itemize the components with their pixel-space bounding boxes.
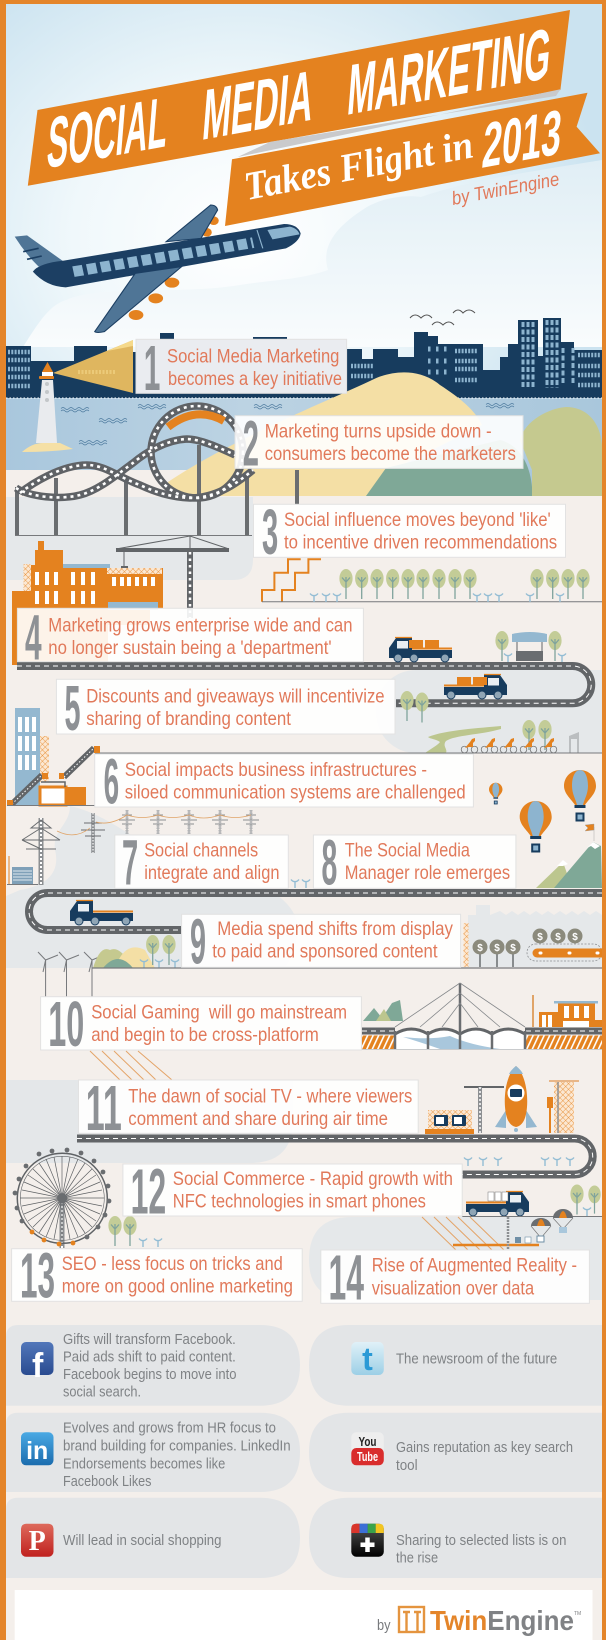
box 5	[56, 672, 395, 744]
beige lower ground	[6, 496, 602, 656]
box 14	[321, 1241, 589, 1313]
byline: by TwinEngine	[450, 169, 561, 210]
icon: YouTube: You	[358, 1434, 377, 1449]
panel: Facebook	[6, 1325, 300, 1406]
icon: YouTube	[351, 1432, 384, 1465]
sky	[6, 4, 602, 400]
box 6: siloed communication systems are challenged	[125, 781, 466, 803]
box 6: Social impacts business infrastructures -	[125, 759, 427, 781]
ground line 3	[92, 967, 602, 969]
crane	[116, 536, 229, 618]
grey zone: road 3	[6, 1080, 293, 1163]
box 1: Social Media Marketing	[167, 346, 339, 368]
trees by wheel	[108, 1216, 162, 1247]
panel: LinkedIn	[6, 1413, 300, 1492]
logo wordmark: TwinEngine	[430, 1605, 574, 1636]
panel: LinkedIn: Evolves and grows from HR focus to	[63, 1420, 276, 1437]
tall crane	[464, 1087, 504, 1133]
box 13	[12, 1240, 302, 1312]
footer panel: by	[377, 1617, 391, 1634]
panel: YouTube: Gains reputation as key search	[396, 1439, 573, 1456]
bridge	[362, 983, 602, 1050]
sea	[6, 398, 602, 496]
money bags and conveyor: $	[572, 932, 578, 943]
box 13: more on good online marketing	[62, 1276, 293, 1298]
grey zone: lower road 1	[376, 670, 602, 753]
box 1: 1	[144, 332, 160, 404]
balloons	[489, 770, 596, 852]
clouds	[23, 160, 602, 347]
box 2: Marketing turns upside down -	[265, 420, 492, 442]
skyline	[6, 318, 602, 398]
stairs	[262, 559, 321, 602]
panel: Google Plus: the rise	[396, 1549, 438, 1566]
money bags and conveyor: $	[477, 943, 483, 954]
panel: Twitter	[309, 1325, 602, 1406]
gate	[569, 732, 579, 753]
box 7: integrate and align	[144, 862, 280, 884]
box 7	[115, 826, 288, 898]
box 13: 13	[20, 1240, 55, 1312]
box 12: NFC technologies in smart phones	[173, 1191, 426, 1213]
box 14: visualization over data	[372, 1277, 534, 1299]
green path	[425, 726, 501, 753]
box 10: 10	[48, 988, 84, 1060]
panel: LinkedIn: brand building for companies. LinkedIn	[63, 1437, 291, 1454]
TV platform	[425, 1110, 474, 1134]
panel: LinkedIn: Facebook Likes	[63, 1473, 152, 1490]
box 7: Social channels	[144, 840, 258, 862]
box 2	[235, 408, 523, 480]
tower and escalators	[7, 708, 100, 806]
sprouts between boxes	[291, 880, 310, 888]
box 1: becomes a key initiative	[168, 368, 342, 390]
box 6: 6	[104, 745, 119, 817]
box 9	[182, 905, 461, 977]
money bags and conveyor: $	[555, 932, 561, 943]
footer panel: TM	[574, 1611, 581, 1617]
money bags and conveyor	[464, 923, 602, 967]
footer panel	[15, 1590, 592, 1640]
birds	[410, 310, 475, 325]
box 12	[123, 1155, 462, 1227]
panel: YouTube: tool	[396, 1457, 418, 1474]
panel: Facebook: social search.	[63, 1384, 141, 1401]
box 14: 14	[328, 1241, 364, 1313]
ribbon shadow	[238, 89, 560, 157]
market stall	[495, 631, 566, 662]
icon: YouTube: Tube	[357, 1449, 378, 1464]
airplane	[15, 205, 301, 332]
box 8: The Social Media	[345, 840, 470, 862]
panel: LinkedIn: Endorsements becomes like	[63, 1455, 225, 1472]
box 3: Social influence moves beyond 'like'	[284, 509, 551, 531]
box 11: comment and share during air time	[128, 1108, 388, 1130]
box 8	[313, 826, 516, 898]
ferris wheel	[13, 1148, 111, 1248]
beige ground	[6, 470, 276, 500]
logo icon	[399, 1607, 424, 1632]
grey zone: road 2 wave	[6, 806, 298, 968]
box 7: 7	[122, 826, 138, 898]
panel: Facebook: Facebook begins to move into	[63, 1366, 236, 1383]
panel: Pinterest	[6, 1498, 300, 1578]
cyclists	[461, 720, 557, 753]
factory	[12, 541, 163, 665]
ground line 2	[95, 752, 602, 754]
icon: Google Plus	[351, 1524, 384, 1557]
sprouts by road 3	[464, 1158, 574, 1166]
money bags and conveyor: $	[494, 943, 500, 954]
sand behind coaster	[168, 445, 300, 496]
title: subtitle: Takes Flight in	[240, 122, 477, 209]
lighthouse	[22, 362, 73, 452]
green hill	[366, 440, 532, 496]
grey factory silhouette	[468, 905, 602, 967]
sand hill	[168, 372, 482, 496]
lighthouse beam	[53, 340, 133, 393]
truck 4	[466, 1192, 529, 1216]
roller coaster	[15, 406, 297, 536]
construction tower	[547, 1081, 579, 1133]
title: main: MEDIA	[200, 56, 316, 156]
box 3: to incentive driven recommendations	[284, 531, 557, 553]
money bags and conveyor: $	[510, 943, 516, 954]
icon: Pinterest	[21, 1524, 54, 1557]
icon: LinkedIn	[21, 1432, 54, 1465]
icon: Facebook: f	[32, 1347, 44, 1385]
ground line 4	[462, 1216, 602, 1218]
road 3	[77, 1138, 593, 1174]
trees right	[570, 1184, 601, 1216]
box 12: Social Commerce - Rapid growth with	[173, 1168, 453, 1190]
mountains	[536, 824, 602, 888]
wind turbines	[38, 952, 104, 997]
box 4: 4	[25, 601, 42, 673]
box 9: to paid and sponsored content	[212, 941, 438, 963]
building by bridge	[533, 995, 602, 1027]
panel: Pinterest: Will lead in social shopping	[63, 1532, 222, 1549]
money bags and conveyor: $	[537, 932, 543, 943]
box 12: 12	[131, 1155, 166, 1227]
box 4: no longer sustain being a 'department'	[48, 637, 332, 659]
trees below road	[400, 691, 429, 722]
diagonal hatch lines	[90, 1051, 172, 1080]
panel: Google Plus	[309, 1498, 602, 1578]
box 5: sharing of branding content	[86, 708, 291, 730]
box 5: Discounts and giveaways will incentivize	[86, 685, 385, 707]
tree row and ground	[262, 569, 602, 602]
box 11	[78, 1072, 418, 1144]
grey zone: coaster	[6, 497, 253, 580]
title: subtitle	[240, 97, 564, 209]
panel: Google Plus: Sharing to selected lists is on	[396, 1532, 566, 1549]
panel: Twitter: The newsroom of the future	[396, 1351, 557, 1368]
box 13: SEO - less focus on tricks and	[62, 1253, 283, 1275]
box 2: 2	[243, 408, 259, 480]
box 10	[41, 988, 361, 1060]
title: main: SOCIAL	[44, 82, 171, 185]
icon: Twitter	[351, 1341, 384, 1377]
box 9: Media spend shifts from display	[217, 918, 453, 940]
box 2: consumers become the marketers	[265, 443, 516, 465]
box 3	[254, 496, 566, 568]
box 4: Marketing grows enterprise wide and can	[48, 615, 353, 637]
box 6	[95, 745, 473, 817]
truck 1	[389, 638, 452, 662]
box 10: and begin to be cross-platform	[91, 1024, 319, 1046]
box 11: The dawn of social TV - where viewers	[128, 1085, 413, 1107]
box 4	[17, 601, 363, 673]
icon: Pinterest: P	[29, 1526, 46, 1557]
grey zone: box 14	[309, 1217, 602, 1300]
icon: Twitter: t	[362, 1341, 373, 1377]
power lines	[7, 810, 259, 885]
panel: YouTube	[309, 1413, 602, 1492]
icon: Facebook	[21, 1342, 54, 1385]
rocket	[495, 1066, 537, 1132]
panel: Facebook: Paid ads shift to paid content.	[63, 1348, 236, 1365]
title banner: back ribbon	[28, 10, 570, 186]
box 8: 8	[322, 826, 337, 898]
truck 2	[444, 674, 507, 699]
truck 3	[70, 900, 133, 925]
road 1	[17, 666, 591, 703]
olive hill	[520, 407, 602, 496]
box 5: 5	[64, 672, 80, 744]
box 11: 11	[86, 1072, 122, 1144]
box 10: Social Gaming will go mainstream	[91, 1002, 347, 1024]
box 1	[136, 332, 347, 404]
box 9: 9	[190, 905, 206, 977]
box 3: 3	[262, 496, 278, 568]
title: main	[44, 14, 554, 185]
icon: LinkedIn: in	[26, 1437, 48, 1465]
augmented reality scene	[422, 1209, 573, 1250]
panel: Facebook: Gifts will transform Facebook.	[63, 1331, 236, 1348]
title banner: front ribbon	[225, 93, 600, 226]
box 8: Manager role emerges	[345, 862, 510, 884]
hills and trees by box 9	[93, 935, 179, 968]
road 2	[29, 893, 602, 930]
